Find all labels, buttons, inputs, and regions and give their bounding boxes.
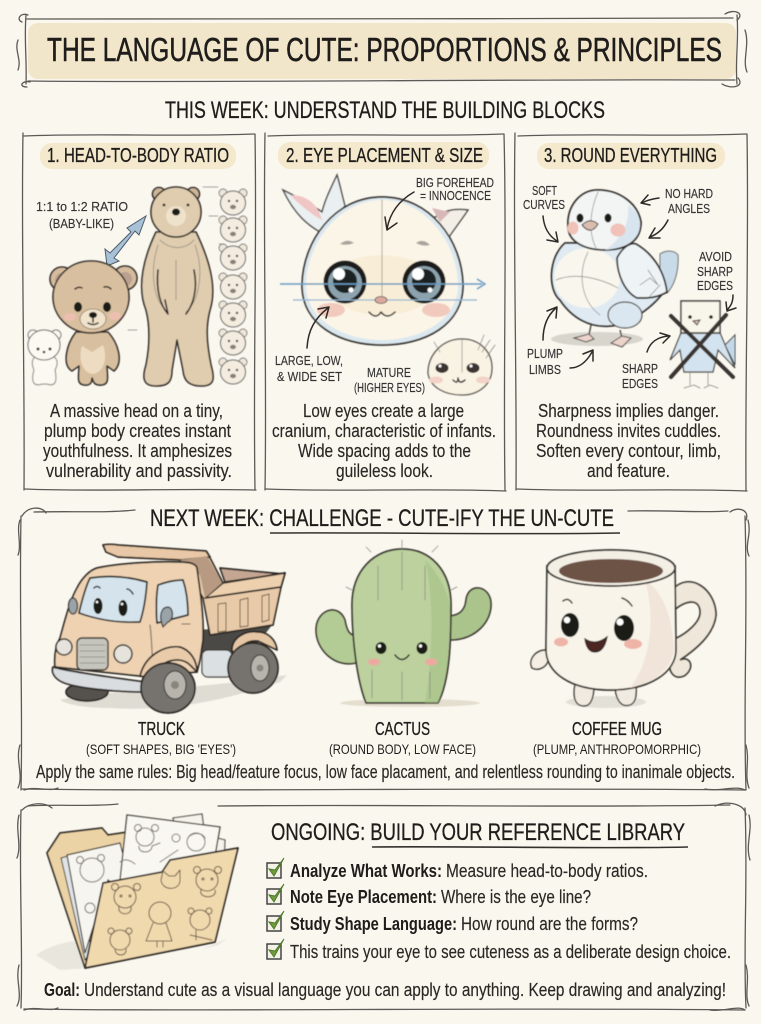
ratio label <box>36 200 128 231</box>
doodles on folder <box>108 866 222 955</box>
check item: eye placement <box>267 884 591 907</box>
curve labels and arrows: SOFT <box>532 184 557 198</box>
forehead label and arrow: BIG FOREHEAD <box>416 176 494 190</box>
truck caption: (SOFT SHAPES, BIG 'EYES') <box>86 741 236 757</box>
body text <box>272 401 496 481</box>
plump limb labels and arrows: LIMBS <box>529 363 561 377</box>
body text <box>43 401 232 481</box>
cactus illustration <box>316 540 491 707</box>
heading pill: eye placement: 2. EYE PLACEMENT & SIZE <box>286 145 483 167</box>
ratio label: 1:1 to 1:2 RATIO <box>36 200 128 214</box>
heading pill: eye placement <box>278 142 489 169</box>
panel: ongoing reference library <box>17 803 750 1010</box>
panel: head-to-body ratio <box>22 133 256 490</box>
title banner <box>17 12 747 87</box>
plump limb labels and arrows: PLUMP <box>527 347 563 361</box>
checklist <box>267 858 731 962</box>
body text <box>536 401 721 481</box>
check item: shape language <box>267 911 638 934</box>
truck caption <box>86 719 236 757</box>
mature face label: MATURE <box>367 366 411 380</box>
body text: Low eyes create a large <box>303 401 464 421</box>
crossed-out sharp bird <box>670 301 735 388</box>
cactus caption: CACTUS <box>375 719 430 739</box>
truck illustration <box>52 544 287 713</box>
eye label and arrow: LARGE, LOW, <box>275 354 343 368</box>
eye label and arrow <box>275 307 343 384</box>
plump limb labels and arrows <box>527 307 593 377</box>
forehead label and arrow <box>385 176 494 230</box>
cactus caption <box>329 719 476 757</box>
sharp edges label: EDGES <box>622 377 658 391</box>
check item: eye placement: Note Eye Placement: <box>290 887 437 907</box>
hard angle labels and arrows: NO HARD <box>665 187 713 201</box>
check item: shape language: Study Shape Language: <box>290 914 457 934</box>
forehead label and arrow: = INNOCENCE <box>420 189 491 203</box>
heading pill: head-to-body ratio <box>40 143 236 169</box>
eye label and arrow: & WIDE SET <box>277 370 342 384</box>
check item: analyze: Analyze What Works: <box>290 861 442 881</box>
coffee mug caption <box>533 719 701 757</box>
body text: plump body creates instant <box>44 421 231 441</box>
section heading: next week: NEXT WEEK: CHALLENGE - CUTE-IFY THE UN-CUTE <box>150 505 614 532</box>
curve labels and arrows: CURVES <box>523 198 565 212</box>
body text: Soften every contour, limb, <box>536 441 721 461</box>
cute rabbit face with eye lines <box>280 175 485 345</box>
folder full of sketches <box>36 814 238 970</box>
avoid sharp edges label <box>697 250 736 311</box>
body text: Sharpness implies danger. <box>538 401 719 421</box>
hard angle labels and arrows: ANGLES <box>668 202 710 216</box>
body text: cranium, characteristic of infants. <box>272 421 496 441</box>
curve labels and arrows <box>523 184 565 242</box>
goal statement: Goal: <box>44 980 80 1000</box>
body text: Wide spacing adds to the <box>298 441 471 461</box>
sharp edges label <box>622 333 670 391</box>
check item: shape language: How round are the forms? <box>461 914 638 934</box>
small white bear sketch <box>28 330 61 385</box>
check item: analyze <box>267 858 648 881</box>
head-count measuring column <box>128 187 247 384</box>
body text: and feature. <box>587 461 670 481</box>
ratio label: (BABY-LIKE) <box>49 217 114 231</box>
heading pill: head-to-body ratio: 1. HEAD-TO-BODY RATIO <box>47 145 229 167</box>
cute brown bear <box>50 261 137 385</box>
body text: youthfulness. It amphesizes <box>43 441 232 461</box>
cactus caption: (ROUND BODY, LOW FACE) <box>329 741 476 757</box>
body text: vulnerability and passivity. <box>46 461 232 481</box>
avoid sharp edges label: AVOID <box>699 250 732 264</box>
coffee mug caption: (PLUMP, ANTHROPOMORPHIC) <box>533 741 701 757</box>
coffee mug caption: COFFEE MUG <box>572 719 662 739</box>
panel: next week challenge <box>18 505 749 790</box>
check item: eye placement: Where is the eye line? <box>441 887 591 907</box>
check item: analyze: Measure head-to-body ratios. <box>446 861 648 881</box>
coffee mug illustration <box>531 550 716 708</box>
body text: Roundness invites cuddles. <box>536 421 721 441</box>
small sketch doodles on pages <box>76 824 205 913</box>
hard angle labels and arrows <box>641 187 713 238</box>
body text: A massive head on a tiny, <box>50 401 223 421</box>
truck caption: TRUCK <box>138 719 185 739</box>
arrow: double-headed blue <box>105 216 146 266</box>
panel: eye placement and size <box>264 133 506 491</box>
mature face label: (HIGHER EYES) <box>354 381 425 395</box>
panel: round everything <box>514 133 748 491</box>
sharp edges label: SHARP <box>622 362 658 376</box>
body text: guileless look. <box>336 461 433 481</box>
avoid sharp edges label: EDGES <box>697 279 733 293</box>
mature face label <box>354 366 425 395</box>
avoid sharp edges label: SHARP <box>697 265 733 279</box>
mature face sketch <box>428 335 495 395</box>
tall realistic bear <box>142 187 213 386</box>
section heading: this week: THIS WEEK: UNDERSTAND THE BUILDING BLOCKS <box>165 97 605 124</box>
round bird <box>551 190 678 347</box>
